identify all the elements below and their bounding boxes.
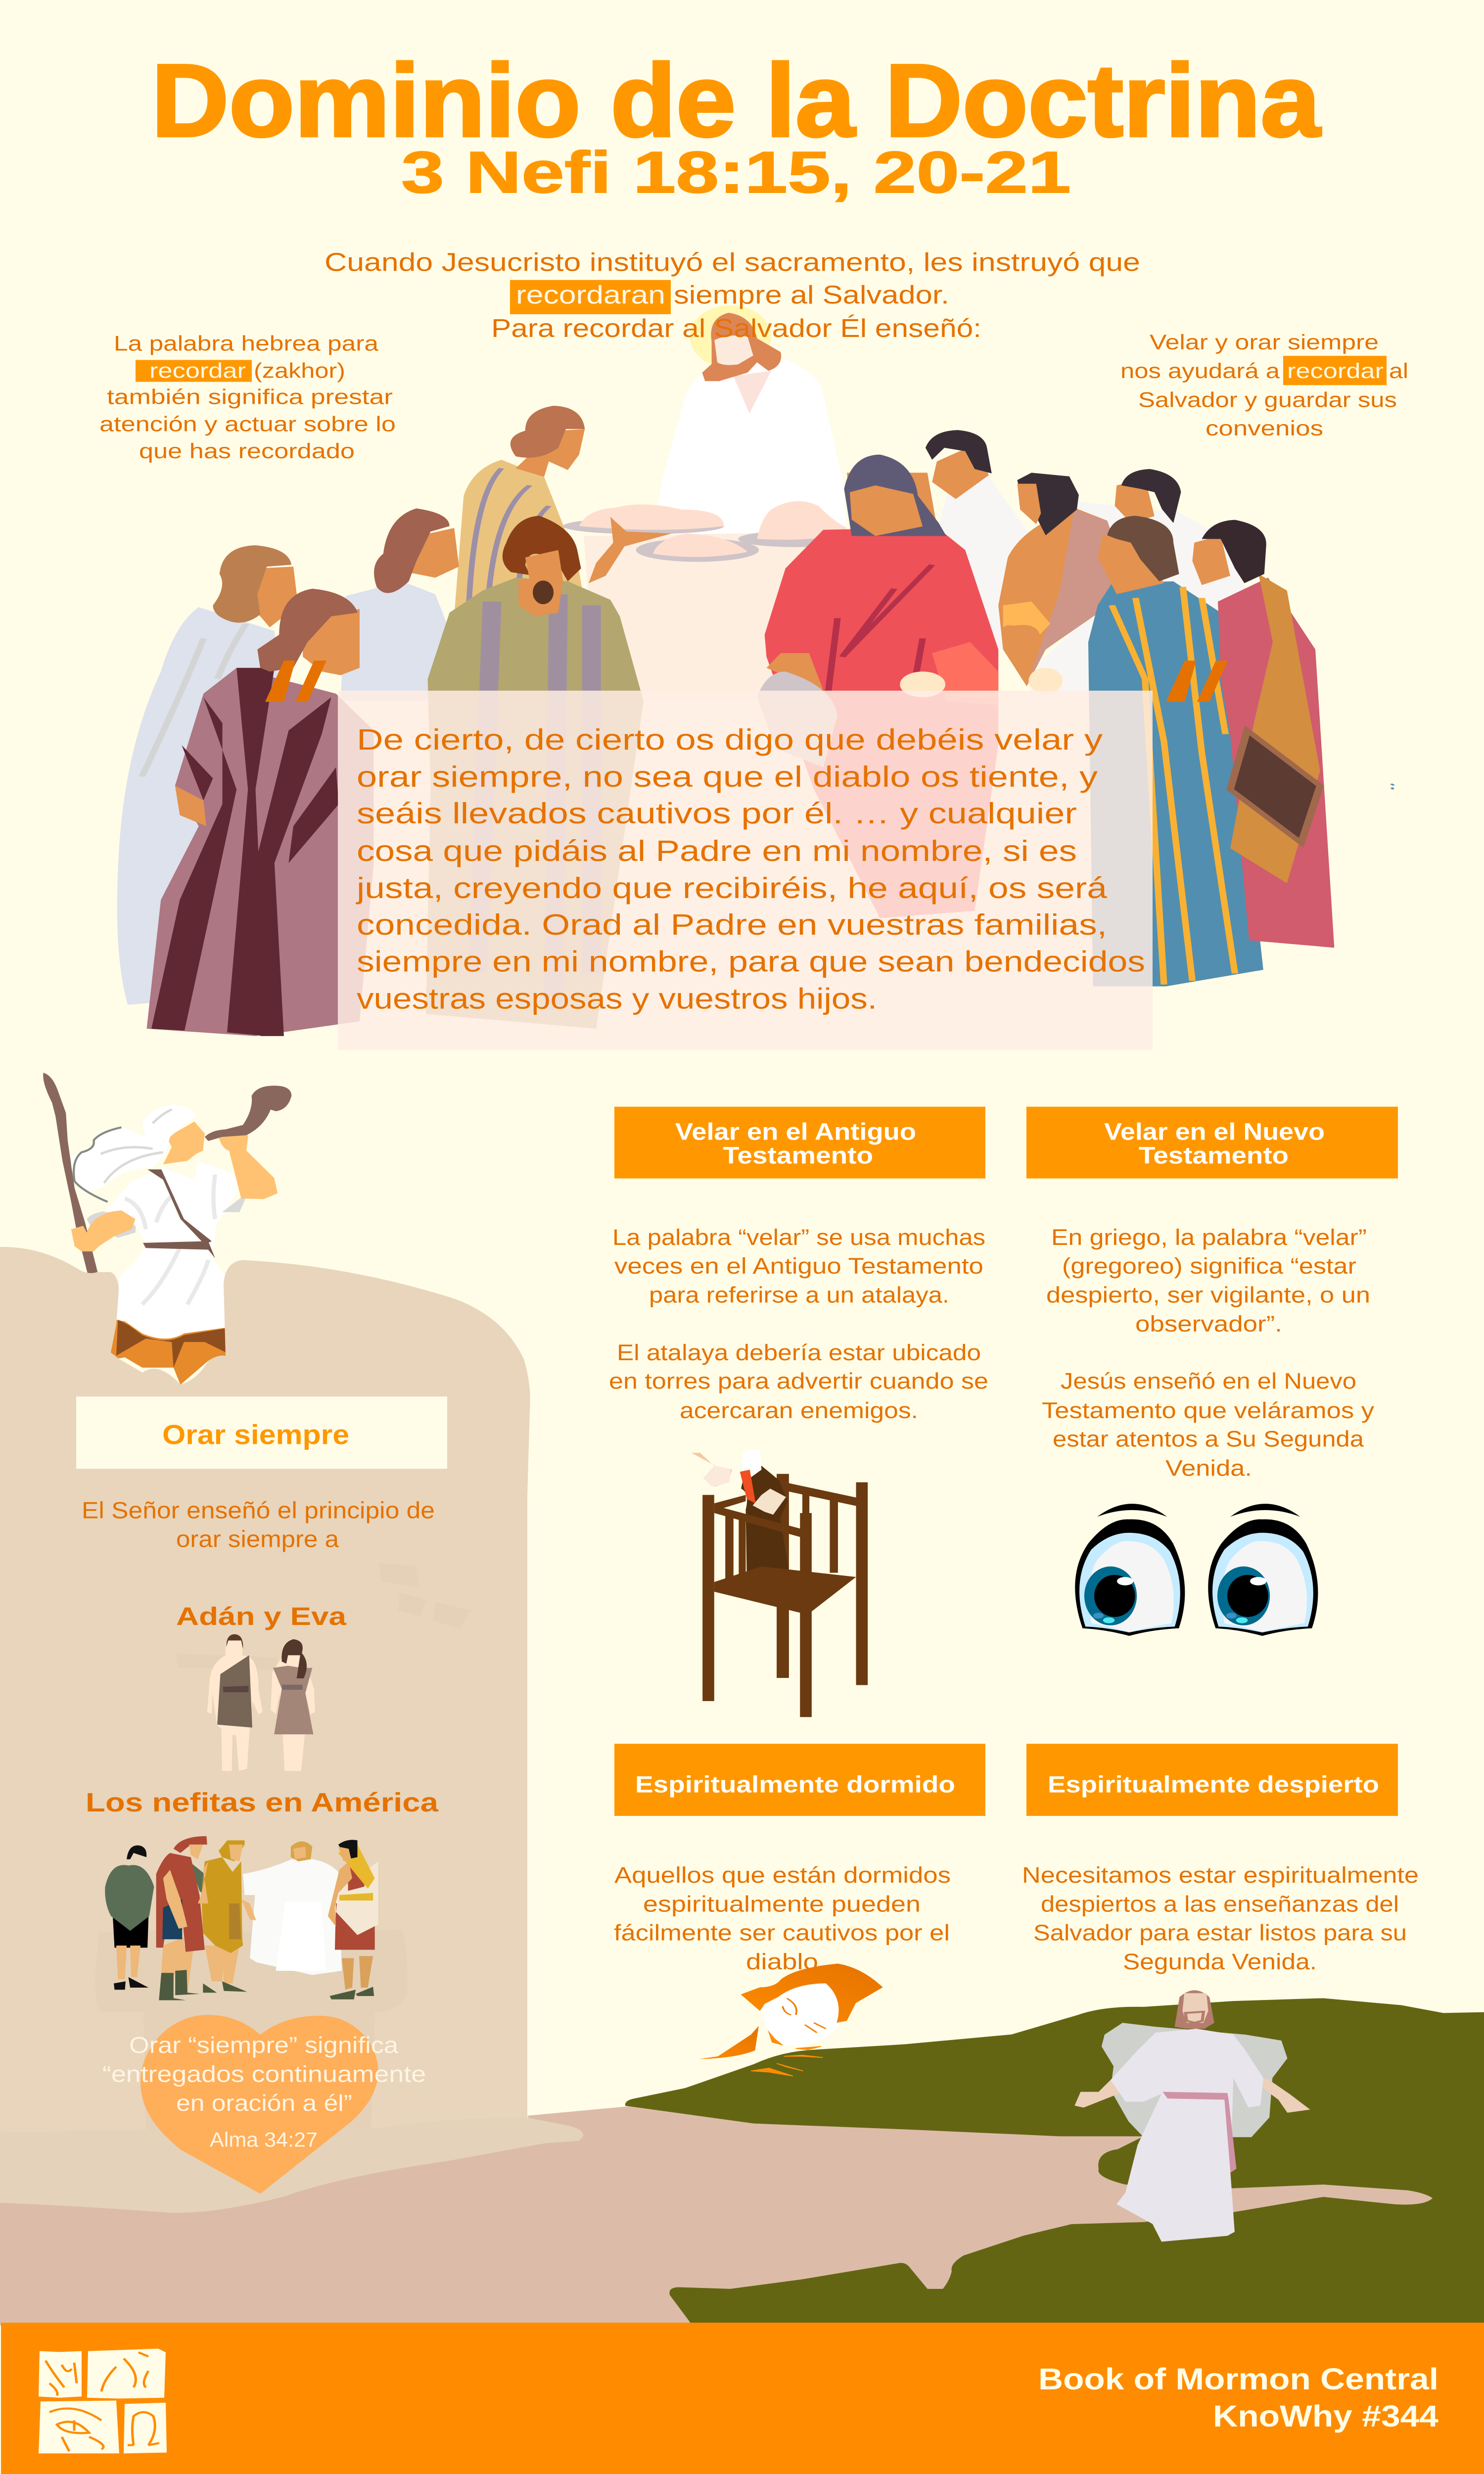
left note: zakhor: atención y actuar sobre lo [99,413,396,436]
left quotation mark [265,661,326,702]
scripture quote text [356,723,1145,1015]
ground layers [0,1998,1484,2326]
Jesus at the table [653,305,847,536]
footer credits: KnoWhy #344 [1213,2400,1438,2433]
text: Nuevo Testamento: despierto, ser vigilante, o un [1046,1283,1370,1307]
apostle in red robe [757,473,1063,918]
apostle in green robe [426,516,644,1029]
right note: velar y orar: nos ayudará a [1120,359,1280,382]
scripture quote text: De cierto, de cierto os digo que debéis velar y [357,723,1103,756]
right quotation mark [1166,661,1228,702]
intro text: recordaran [516,281,665,309]
heading: Orar siempre: Orar siempre [162,1420,349,1450]
left note: zakhor: La palabra hebrea para [114,332,379,355]
text: El Señor: El Señor enseñó el principio de [82,1498,435,1523]
illustration: last supper group [117,305,1394,1050]
icon: Adam and Eve [207,1634,315,1771]
footer bar [1,2323,1484,2474]
text: dormido [614,1862,951,1974]
left note: zakhor [99,332,396,463]
text: dormido: Aquellos que están dormidos [614,1862,951,1888]
heading: Los nefitas: Los nefitas en América [86,1787,439,1817]
icon: wide-open eyes [1075,1504,1318,1636]
intro text: siempre al Salvador. [674,281,949,309]
right note: velar y orar: recordar [1287,359,1384,382]
scripture quote text: concedida. Orad al Padre en vuestras familias, [357,908,1107,941]
plates and bread [563,501,852,583]
apostle white robe with dark hair [908,430,1031,650]
ground: pink path [0,2105,1484,2326]
scripture quote text: justa, creyendo que recibiréis, he aquí, os será [356,872,1108,904]
apostle in front left, striped robe [147,589,374,1036]
footer credits: Book of Mormon Central [1038,2363,1438,2396]
text: Antiguo Testamento: veces en el Antiguo Testamento [614,1253,983,1279]
text: Antiguo Testamento: El atalaya debería estar ubicado [617,1340,981,1365]
right note: velar y orar [1120,331,1408,440]
left note: zakhor: (zakhor) [254,359,345,382]
scripture quote text: seáis llevados cautivos por él. … y cualquier [357,797,1077,830]
box: Espiritualmente despierto: Espiritualmente despierto [1048,1772,1379,1798]
icon: watchman on tower [692,1450,868,1717]
title: Dominio de la Doctrina [151,43,1321,158]
text: dormido: espiritualmente pueden [643,1891,921,1916]
heading: Orar siempre [76,1396,447,1469]
scripture quote panel background [338,691,1153,1050]
box: Espiritualmente despierto [1026,1744,1398,1816]
apostle second from left [341,509,459,701]
woman at far right with shawl [1192,520,1394,948]
apostle in yellow striped robe [454,406,587,616]
text: Nuevo Testamento: observador”. [1135,1311,1282,1336]
intro text: Para recordar al Salvador Él enseñó: [491,314,981,343]
text: despierto: despiertos a las enseñanzas del [1041,1891,1399,1916]
box: Velar en el Nuevo Testamento [1026,1107,1398,1179]
text: El Señor: orar siempre a [176,1526,339,1553]
text: Antiguo Testamento [609,1225,988,1423]
icon: Nephites with Jesus [105,1836,378,2000]
text: Nuevo Testamento: Venida. [1165,1456,1252,1480]
text: despierto: Necesitamos estar espiritualmente [1022,1862,1419,1888]
highlight: recordaran [510,280,671,314]
text: El Señor [82,1498,435,1553]
box: Espiritualmente dormido: Espiritualmente dormido [635,1772,955,1798]
text: Nuevo Testamento: (gregoreo) significa “estar [1062,1253,1356,1279]
icon: watchman blowing shofar [43,1073,291,1385]
text: despierto: Segunda Venida. [1123,1949,1317,1974]
icon: Jesus with open arms [1074,1990,1310,2242]
text: Nuevo Testamento: En griego, la palabra “velar” [1051,1225,1367,1250]
highlight: recordar [136,360,252,382]
apostle with bare chest and sash [998,473,1164,701]
box: Velar en el Nuevo Testamento: Testamento [1139,1142,1289,1169]
box: Velar en el Nuevo Testamento: Velar en el Nuevo [1104,1119,1325,1145]
text: despierto [1022,1862,1419,1974]
scripture quote text: siempre en mi nombre, para que sean bendecidos [357,945,1145,978]
text: Nuevo Testamento [1042,1225,1374,1480]
heading: Adán y Eva: Adán y Eva [176,1602,347,1630]
faint stones and platform on the hill [95,1563,470,2132]
right note: velar y orar: convenios [1206,417,1323,440]
logo tiles [39,2349,167,2453]
ground: beige [0,2118,583,2213]
hill background [0,1247,530,2136]
right note: velar y orar: Salvador y guardar sus [1138,388,1397,412]
text: dormido: diablo [746,1949,818,1974]
footer credits [1038,2363,1438,2433]
icon: sleeping head [699,1964,883,2076]
scripture quote text: vuestras esposas y vuestros hijos. [357,982,877,1015]
heart callout: Orar “siempre” significa [129,2032,398,2058]
right note: velar y orar: Velar y orar siempre [1150,331,1379,354]
heart callout: Alma 34:27 [210,2128,318,2151]
scripture quote text: orar siempre, no sea que el diablo os tiente, y [357,761,1098,793]
head of apostle in red robe [844,455,946,536]
text: Nuevo Testamento: Jesús enseñó en el Nuevo [1061,1369,1356,1394]
box: Velar en el Antiguo Testamento [614,1107,985,1179]
text: despierto: Salvador para estar listos para su [1033,1920,1407,1946]
highlight: recordar [1283,356,1387,385]
text: dormido: fácilmente ser cautivos por el [614,1920,950,1946]
apostle with dark hair behind [1115,469,1258,616]
intro text: Cuando Jesucristo instituyó el sacramento, les instruyó que [325,248,1140,277]
left note: zakhor: también significa prestar [107,385,393,409]
text: Antiguo Testamento: La palabra “velar” se usa muchas [612,1225,985,1250]
left note: zakhor: recordar [149,359,246,382]
intro text [325,248,1140,343]
text: Antiguo Testamento: en torres para advertir cuando se [609,1369,988,1394]
box: Espiritualmente dormido [614,1744,985,1816]
apostle in blue robe [1088,516,1263,986]
box: Velar en el Antiguo Testamento: Velar en el Antiguo [675,1119,916,1145]
scripture quote text: cosa que pidáis al Padre en mi nombre, si es [357,835,1077,867]
heart callout: en oración a él” [176,2090,352,2116]
apostle far left in pale robe [117,545,298,1005]
text: Antiguo Testamento: para referirse a un atalaya. [649,1283,949,1307]
heart callout [102,2015,426,2194]
box: Velar en el Antiguo Testamento: Testamento [723,1142,873,1169]
text: Nuevo Testamento: estar atentos a Su Segunda [1053,1427,1364,1451]
right note: velar y orar: al [1389,359,1408,382]
left note: zakhor: que has recordado [139,439,355,463]
text: Nuevo Testamento: Testamento que veláramos y [1042,1398,1374,1423]
heart callout: “entregados continuamente [102,2061,426,2087]
ground: green field [625,1998,1484,2326]
text: Antiguo Testamento: acercaran enemigos. [680,1398,918,1423]
subtitle: 3 Nefi 18:15, 20-21 [401,139,1071,205]
table [584,532,831,701]
